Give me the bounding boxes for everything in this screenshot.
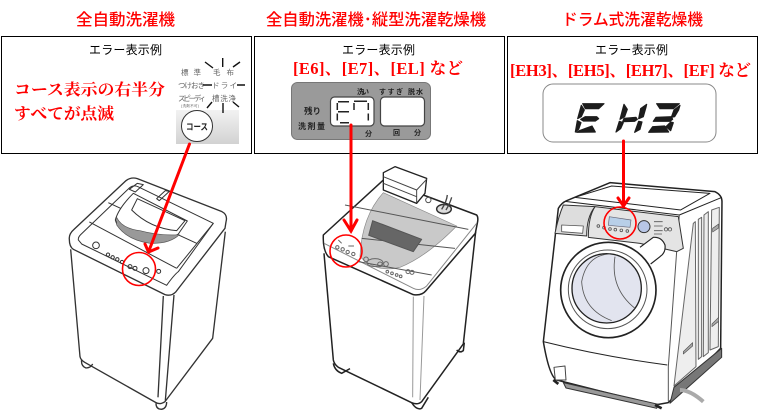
- icon: course button with blinking labels: スピーディ: [178, 93, 206, 103]
- error codes 3: [EH3]、[EH5]、[EH7]、[EF] など: [510, 61, 751, 80]
- icon: course button with blinking labels: 槽洗浄: [212, 93, 236, 103]
- illustration: vertical washer dryer: [323, 167, 478, 409]
- icon: course button with blinking labels: ドライ: [212, 81, 237, 90]
- icon: course button with blinking labels: [176, 58, 245, 144]
- control panel display E7: 脱水: [408, 87, 423, 96]
- display EH3: [543, 84, 716, 142]
- panel heading 2: エラー表示例: [342, 43, 415, 57]
- error description line 1: コース表示の右半分: [14, 80, 165, 99]
- illustration: top-load washer: [69, 178, 226, 409]
- icon: course button with blinking labels: (洗剤不可): [181, 103, 199, 108]
- callout: circle on washer 2 panel: [330, 235, 362, 267]
- panel heading 3: エラー表示例: [595, 43, 668, 57]
- title: fully automatic washer: 全自動洗濯機: [76, 11, 175, 29]
- title: washer and vertical washer dryer: 全自動洗濯機･縦型洗濯乾燥機: [266, 11, 486, 29]
- control panel display E7: 洗い: [357, 87, 369, 96]
- title: drum washer dryer: ドラム式洗濯乾燥機: [562, 11, 703, 29]
- error codes 2: [E6]、[E7]、[EL] など: [293, 59, 463, 78]
- arrow: display to washer 2: [344, 125, 357, 231]
- control panel display E7: 分: [414, 128, 421, 137]
- panel: error example 3: [508, 36, 758, 154]
- icon: course button with blinking labels: コース: [186, 122, 208, 132]
- icon: course button with blinking labels: 毛 布: [213, 67, 234, 77]
- panel: error example 2: [254, 36, 504, 154]
- callout: circle on washer 1 panel: [122, 252, 156, 286]
- control panel display E7: 洗剤量: [298, 121, 325, 131]
- callout: circle on washer 3 panel: [604, 207, 636, 239]
- illustration: drum washer dryer: [543, 183, 722, 408]
- arrow: display to washer 1: [145, 144, 190, 252]
- icon: course button with blinking labels: つけおき: [178, 81, 205, 90]
- panel: error example 1: [2, 36, 252, 154]
- arrow: display to washer 3: [618, 141, 629, 206]
- panel heading 1: エラー表示例: [89, 43, 162, 57]
- control panel display E7: すすぎ: [379, 87, 403, 96]
- error description line 2: すべてが点滅: [14, 104, 114, 123]
- control panel display E7: [292, 82, 430, 140]
- icon: course button with blinking labels: 標 準: [181, 67, 202, 77]
- control panel display E7: 残り: [304, 106, 321, 116]
- control panel display E7: 回: [393, 129, 400, 137]
- control panel display E7: 分: [365, 129, 372, 138]
